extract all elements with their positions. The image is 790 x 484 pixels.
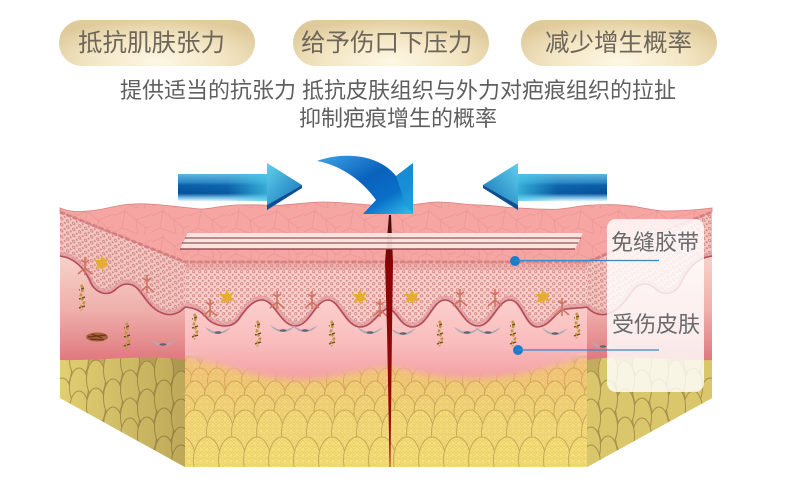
subtitle line two: 抑制疤痕增生的概率: [299, 106, 497, 131]
dermis wave outlines: [60, 254, 712, 327]
subtitle line one: 提供适当的抗张力 抵抗皮肤组织与外力对疤痕组织的拉扯: [120, 78, 676, 103]
dermis lower: right side: [587, 250, 712, 360]
speckled dermis: right side: [587, 212, 712, 315]
label: injured skin: 受伤皮肤: [612, 312, 700, 337]
nerve endings: [78, 257, 569, 317]
leader: injured skin: [513, 345, 659, 355]
arrow: left pushing right: [178, 163, 302, 210]
pill: resist skin tension: 抵抗肌肤张力: [78, 30, 225, 57]
fat layer: front: [185, 355, 587, 467]
pill: apply wound pressure: [293, 20, 489, 66]
arrow: curved downward: [317, 156, 413, 214]
pill: resist skin tension: [59, 20, 255, 66]
pill: reduce hyperplasia: 减少增生概率: [545, 30, 692, 57]
collagen fibers: [79, 285, 580, 348]
epidermis top surface: [60, 202, 712, 262]
suture-free tape strip: [180, 233, 583, 249]
brown pigment cluster: [86, 332, 108, 342]
pill: reduce hyperplasia: [521, 20, 717, 66]
wound cut: [385, 215, 393, 467]
leader: tape: [510, 256, 659, 266]
speckled dermis: front: [185, 262, 587, 327]
fat layer: right side: [582, 340, 720, 483]
yellow cells: [94, 255, 551, 305]
arrow: right pushing left: [483, 163, 607, 210]
dermis lower: left side: [60, 250, 185, 360]
speckled dermis: left side: [60, 212, 185, 315]
label panel: [607, 219, 704, 392]
fat layer: left side: [52, 340, 190, 483]
epidermis lower band: [60, 212, 712, 270]
skin diagram: [60, 156, 712, 467]
label: tape: 免缝胶带: [611, 230, 699, 255]
pill: apply wound pressure: 给予伤口下压力: [301, 30, 472, 57]
grey fibroblasts: [150, 325, 616, 348]
dermis lower: front: [185, 300, 587, 384]
